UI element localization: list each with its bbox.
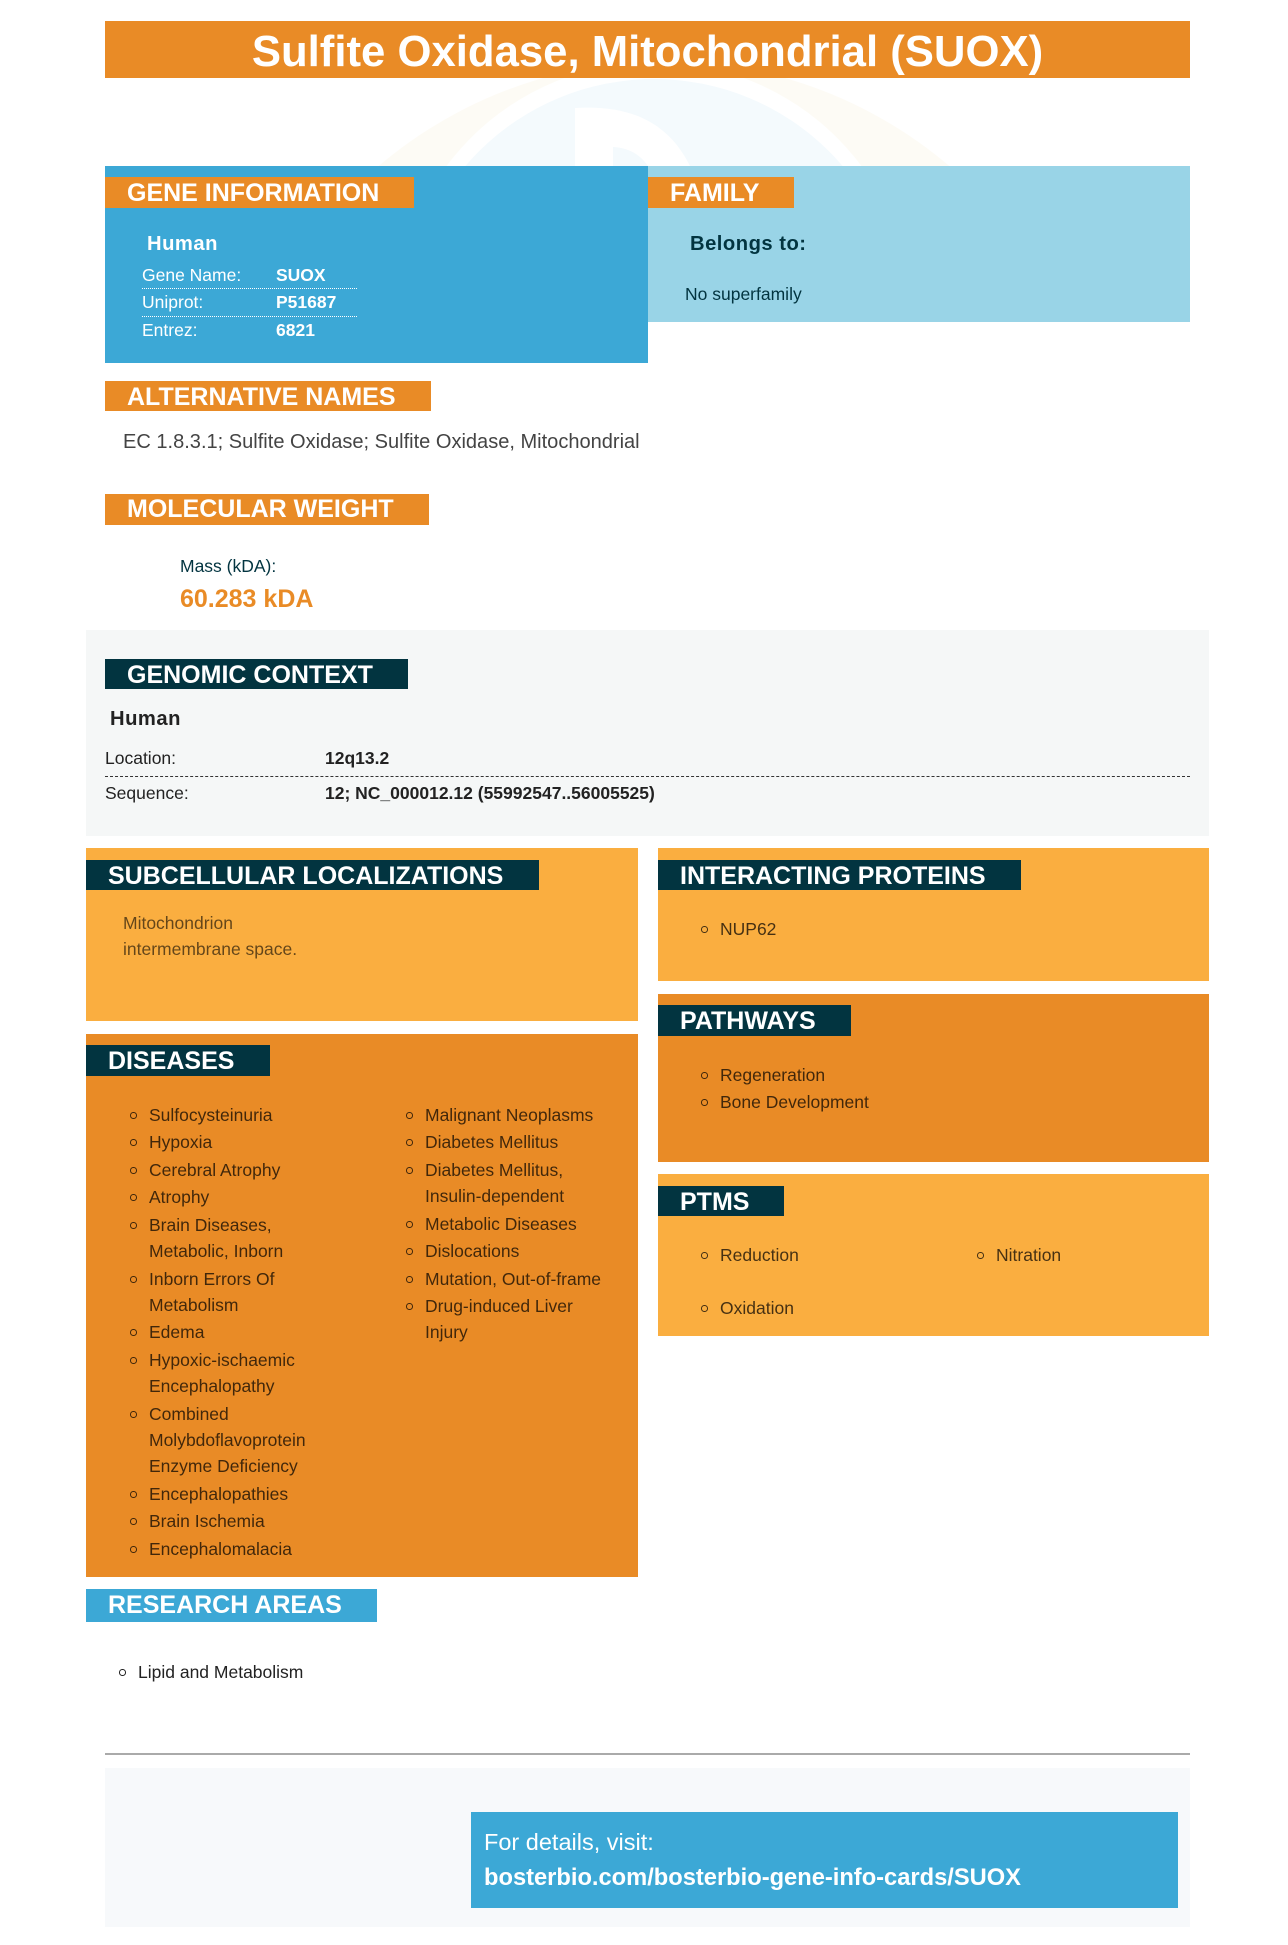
uniprot row — [142, 292, 336, 312]
entrez row: Entrez: — [142, 320, 197, 340]
disease list: column two: Mutation, Out-of-frame — [425, 1269, 601, 1289]
pathway item: Regeneration — [720, 1065, 825, 1085]
heading: genomic context: GENOMIC CONTEXT — [127, 661, 373, 689]
panel: genomic context — [86, 630, 1209, 836]
gene name row: SUOX — [276, 265, 326, 285]
disease list: column two — [406, 1105, 601, 1342]
callout: details link — [471, 1812, 1178, 1908]
callout label: For details, visit: — [484, 1829, 654, 1855]
disease list: column one: Sulfocysteinuria — [149, 1105, 273, 1125]
location row — [105, 748, 389, 768]
disease list: column one: Metabolism — [149, 1295, 238, 1315]
panel: gene information — [105, 166, 648, 363]
disease list: column two: Diabetes Mellitus — [425, 1132, 558, 1152]
belongs to label: Belongs to: — [690, 233, 807, 255]
species label: Human — [110, 708, 181, 730]
disease list: column two: Malignant Neoplasms — [425, 1105, 593, 1125]
sequence row — [105, 783, 655, 803]
ptm item: Nitration — [996, 1245, 1061, 1265]
disease list: column one: Encephalopathy — [149, 1376, 275, 1396]
panel: subcellular localizations — [86, 848, 638, 1021]
gene name row — [142, 265, 326, 285]
disease list: column one: Metabolic, Inborn — [149, 1241, 283, 1261]
title — [105, 21, 1190, 78]
ptm item: Oxidation — [720, 1298, 794, 1318]
heading: gene information: GENE INFORMATION — [127, 179, 379, 207]
location row: Location: — [105, 748, 176, 768]
disease list: column one: Inborn Errors Of — [149, 1269, 274, 1289]
disease list: column two: Metabolic Diseases — [425, 1214, 577, 1234]
heading: pathways: PATHWAYS — [680, 1007, 816, 1035]
heading: family: FAMILY — [670, 179, 759, 207]
heading: alternative names: ALTERNATIVE NAMES — [127, 383, 396, 411]
disease list: column one: Encephalomalacia — [149, 1539, 292, 1559]
mass label: Mass (kDA): — [180, 556, 276, 576]
entrez row — [142, 320, 315, 340]
disease list: column one — [130, 1105, 306, 1559]
disease list: column two: Drug-induced Liver — [425, 1296, 573, 1316]
localization text: intermembrane space. — [123, 939, 297, 959]
disease list: column one: Hypoxia — [149, 1132, 212, 1152]
disease list: column one: Hypoxic-ischaemic — [149, 1350, 295, 1370]
watermark logo — [379, 78, 948, 166]
disease list: column two: Diabetes Mellitus, — [425, 1160, 563, 1180]
localization text — [123, 913, 297, 959]
heading: family — [648, 177, 794, 208]
uniprot row: Uniprot: — [142, 292, 203, 312]
disease list: column two: Insulin-dependent — [425, 1186, 564, 1206]
disease list: column two: Injury — [425, 1322, 468, 1342]
disease list: column one: Encephalopathies — [149, 1484, 288, 1504]
section: alternative names — [105, 381, 640, 453]
protein item: NUP62 — [720, 919, 776, 939]
heading: diseases: DISEASES — [108, 1047, 234, 1075]
disease list: column one: Edema — [149, 1322, 204, 1342]
disease list: column one: Cerebral Atrophy — [149, 1160, 280, 1180]
panel: ptms — [658, 1174, 1209, 1336]
alternative names text: EC 1.8.3.1; Sulfite Oxidase; Sulfite Oxidase, Mitochondrial — [123, 431, 640, 453]
panel: family — [648, 166, 1190, 322]
section: research areas — [86, 1589, 377, 1682]
pathway item: Bone Development — [720, 1092, 869, 1112]
panel: footer — [105, 1768, 1190, 1927]
gene name row: Gene Name: — [142, 265, 241, 285]
research item: Lipid and Metabolism — [138, 1662, 303, 1682]
entrez row: 6821 — [276, 320, 315, 340]
sequence row: Sequence: — [105, 783, 189, 803]
callout url: bosterbio.com/bosterbio-gene-info-cards/SUOX — [484, 1865, 1021, 1891]
heading: pathways — [658, 1005, 851, 1036]
heading: interacting proteins: INTERACTING PROTEINS — [680, 862, 986, 890]
disease list: column one: Atrophy — [149, 1187, 209, 1207]
disease list: column two: Dislocations — [425, 1241, 519, 1261]
title: Sulfite Oxidase, Mitochondrial (SUOX) — [252, 27, 1043, 76]
heading: research areas: RESEARCH AREAS — [108, 1591, 342, 1619]
location row: 12q13.2 — [325, 748, 389, 768]
disease list: column one: Molybdoflavoprotein — [149, 1430, 306, 1450]
sequence row: 12; NC_000012.12 (55992547..56005525) — [325, 783, 655, 803]
localization text: Mitochondrion — [123, 913, 233, 933]
disease list: column one: Combined — [149, 1404, 229, 1424]
heading: molecular weight: MOLECULAR WEIGHT — [127, 495, 394, 523]
heading: ptms: PTMS — [680, 1188, 749, 1216]
heading: subcellular localizations: SUBCELLULAR LOCALIZATIONS — [108, 862, 503, 890]
family value: No superfamily — [685, 284, 802, 304]
panel: interacting proteins — [658, 848, 1209, 981]
disease list: column one: Brain Diseases, — [149, 1215, 272, 1235]
heading: ptms — [658, 1186, 784, 1216]
mass value: 60.283 kDA — [180, 585, 313, 613]
disease list: column one: Brain Ischemia — [149, 1511, 265, 1531]
panel: diseases — [86, 1034, 638, 1577]
heading: diseases — [86, 1045, 270, 1076]
ptm item: Reduction — [720, 1245, 799, 1265]
panel: pathways — [658, 994, 1209, 1162]
species label: Human — [147, 233, 218, 255]
disease list: column one: Enzyme Deficiency — [149, 1456, 298, 1476]
uniprot row: P51687 — [276, 292, 336, 312]
section: molecular weight — [105, 494, 429, 613]
heading: research areas — [86, 1589, 377, 1622]
